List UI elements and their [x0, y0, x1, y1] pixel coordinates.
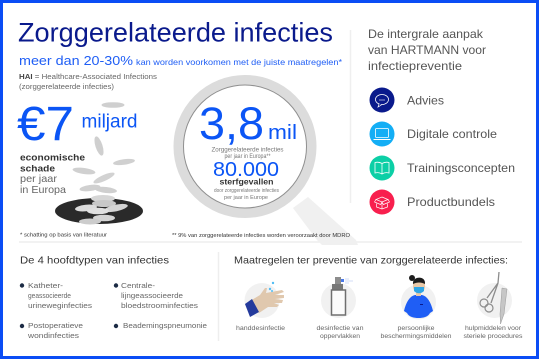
approach heading: van HARTMANN voor [368, 43, 486, 57]
measure: surface disinfection: oppervlakken [320, 333, 360, 340]
infection count [199, 98, 297, 160]
list of infection types: lijngeassocieerde [121, 291, 183, 300]
list of infection types [20, 281, 207, 340]
magnifying glass [178, 80, 358, 245]
deaths figure [213, 159, 279, 201]
economic damage text [20, 152, 85, 196]
measure: hand disinfection: handdesinfectie [236, 325, 285, 332]
item: Productbundels: Productbundels [407, 195, 495, 209]
approach heading [368, 27, 486, 73]
infection count: Zorggerelateerde infecties [212, 148, 284, 154]
coins illustration [55, 102, 143, 224]
economic damage text: schade [20, 164, 55, 174]
HAI definition: HAI = Healthcare-Associated Infections [19, 74, 158, 81]
item: Digitale controle: Digitale controle [407, 127, 497, 141]
subtitle [19, 54, 343, 68]
item: Digitale controle [370, 122, 497, 146]
economic damage text: economische [20, 152, 85, 164]
list of infection types: Centrale- [121, 281, 156, 290]
item: Advies: Advies [407, 94, 444, 108]
measure: hand disinfection [236, 282, 285, 332]
approach heading: infectiepreventie [368, 59, 462, 73]
list of infection types: urineweginfecties [28, 301, 92, 310]
measure: personal protective equipment: beschermingsmiddelen [380, 333, 452, 340]
item: Trainingsconcepten: Trainingsconcepten [407, 161, 515, 175]
list of infection types: Katheter- [28, 281, 64, 290]
footnote left: * schatting op basis van literatuur [20, 232, 107, 238]
measure: sterile instruments: hulpmiddelen voor [465, 325, 522, 332]
measure: sterile instruments: steriele procedures [464, 333, 523, 340]
infection count: per jaar in Europa** [224, 154, 271, 160]
list of infection types: Beademingspneumonie [123, 321, 207, 330]
list of infection types: Postoperatieve [28, 321, 83, 330]
measure: surface disinfection: desinfectie van [316, 325, 364, 332]
infection count: 3,8 [199, 98, 264, 149]
measure: personal protective equipment [380, 275, 452, 340]
measure: sterile instruments [464, 272, 523, 340]
list of infection types: bloedstroominfecties [121, 301, 198, 310]
approach heading: De intergrale aanpak [368, 27, 484, 41]
measure: personal protective equipment: persoonlijke [398, 325, 435, 332]
HAI definition: (zorggerelateerde infecties) [19, 84, 114, 91]
subtitle: kan worden voorkomen met de juiste maatregelen* [136, 57, 343, 67]
deaths figure: door zorggerelateerde infecties [214, 188, 279, 194]
item: Advies [370, 88, 444, 112]
economic damage text: in Europa [20, 184, 66, 196]
deaths figure: per jaar in Europe [224, 195, 268, 201]
euro figure: miljard [82, 112, 138, 132]
footnote right: ** 9% van zorggerelateerde infecties worden veroorzaakt door MDRO [172, 233, 351, 239]
infection count: mil [268, 122, 297, 144]
measure: surface disinfection [316, 277, 364, 340]
item: Trainingsconcepten [370, 156, 515, 180]
title: Zorggerelateerde infecties [18, 18, 333, 48]
list of infection types: geassocieerde [28, 291, 71, 300]
subtitle: meer dan 20-30% [19, 54, 133, 68]
economic damage text: per jaar [20, 173, 58, 185]
euro figure [17, 98, 138, 151]
HAI definition [19, 74, 158, 91]
deaths figure: 80.000 [213, 159, 279, 181]
heading: prevention measures: Maatregelen ter preventie van zorggerelateerde infecties: [234, 254, 508, 266]
deaths figure: sterfgevallen [220, 176, 274, 186]
heading: infection types: De 4 hoofdtypen van infecties [20, 254, 169, 266]
item: Productbundels [370, 190, 495, 214]
list of infection types: wondinfecties [27, 331, 79, 340]
euro figure: €7 [17, 98, 74, 151]
